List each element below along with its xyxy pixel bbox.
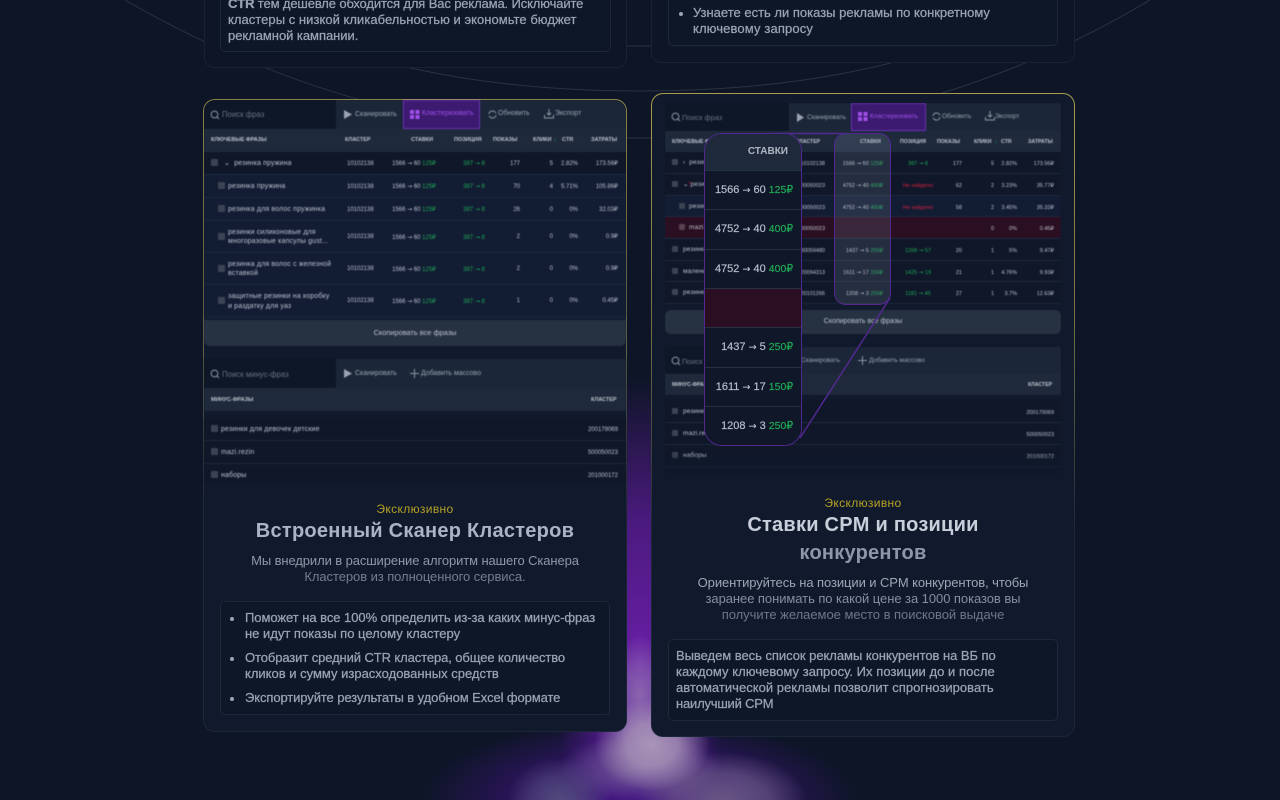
table rows: 10102138 <box>347 184 374 190</box>
highlight: bids column <box>834 133 891 305</box>
minus-phrases header <box>665 374 1061 395</box>
minus-phrases toolbar: Сканировать <box>355 370 397 377</box>
table rows: 0.9₽ <box>606 234 618 240</box>
magnifier rows: 1611 → 17 150₽ <box>716 380 793 392</box>
minus-phrases toolbar: Поиск минус-фраз <box>682 357 745 366</box>
minus-phrases rows <box>666 408 1060 459</box>
table rows: Не найдено <box>903 204 933 210</box>
minus-phrases rows: резинки <box>683 408 708 415</box>
heading: CPM bids and competitor positions <box>747 514 979 564</box>
table header: ПОЗИЦИЯ <box>900 139 926 145</box>
table header: CTR <box>1001 139 1012 145</box>
table rows: вставкой <box>228 270 258 277</box>
table header: ЗАТРАТЫ <box>1028 139 1053 145</box>
table rows: 4.76% <box>1001 270 1017 276</box>
table rows: 2 <box>517 266 520 272</box>
table rows: и раздатку для уаз <box>228 302 291 310</box>
table rows: 0% <box>1009 226 1017 232</box>
minus-phrases rows: 201000172 <box>1026 454 1054 460</box>
table rows: 3.7% <box>1004 291 1017 297</box>
table rows: ⌄ резинка пружина <box>224 160 292 167</box>
panel: CPM bids card <box>651 93 1075 737</box>
table header: ↓ <box>995 139 998 145</box>
magnifier rows: 1566 → 60 125₽ <box>715 184 793 196</box>
minus-phrases header: КЛАСТЕР <box>1028 382 1052 388</box>
table rows: резинка для волос пружинка <box>228 206 325 213</box>
table rows: 1566 → 60 125₽ <box>843 161 883 167</box>
magnifier header: СТАВКИ <box>748 146 788 157</box>
table rows: 2.82% <box>1001 161 1017 167</box>
minus-phrases rows: mazi.rezin <box>683 430 714 437</box>
table rows: 5% <box>1009 248 1017 254</box>
table rows: 2.82% <box>561 161 578 167</box>
table header <box>665 131 1061 152</box>
toolbar: Экспорт <box>555 110 581 117</box>
toolbar: Экспорт <box>995 113 1019 120</box>
table rows: 35.32₽ <box>1037 204 1054 210</box>
magnifier rows: 1437 → 5 250₽ <box>721 341 793 353</box>
minus-phrases rows: наборы <box>221 472 246 479</box>
minus-phrases rows <box>204 418 626 481</box>
text block: right card note <box>668 639 1058 721</box>
table header: КЛАСТЕР <box>796 139 820 145</box>
table rows: 12.63₽ <box>1037 291 1054 297</box>
table rows: 0% <box>569 266 578 272</box>
minus-phrases rows: 500050023 <box>1026 432 1054 438</box>
copy button: Скопировать все фразы <box>374 328 456 337</box>
table rows: 9.93₽ <box>1040 270 1054 276</box>
table rows: 58 <box>956 204 962 210</box>
description: right card: получите желаемое место в поисковой выдаче <box>722 607 1004 622</box>
table header: СТАВКИ <box>860 139 881 145</box>
table header: ПОКАЗЫ <box>937 139 960 145</box>
toolbar: Сканировать <box>355 111 397 118</box>
table rows: 27 <box>956 291 962 297</box>
table rows: 4752 → 40 400₽ <box>843 183 883 189</box>
table rows: 20 <box>956 248 962 254</box>
copy button <box>665 310 1061 334</box>
magnifier rows: 4752 → 40 400₽ <box>715 223 793 235</box>
table rows: 9.47₽ <box>1040 248 1054 254</box>
table rows: резинка пружина <box>228 183 285 190</box>
panel: top left card fragment <box>204 0 627 68</box>
screenshot: competitors table <box>665 103 1061 459</box>
table rows: 10102138 <box>347 207 374 213</box>
minus-phrases toolbar <box>204 359 626 388</box>
screenshot: cluster table <box>203 99 627 481</box>
text block: right card note: каждому ключевому запросу. Их позиции до и после <box>676 664 995 679</box>
table rows: 21 <box>956 270 962 276</box>
label: exclusive right: Эксклюзивно <box>824 496 902 510</box>
table rows <box>665 158 1061 304</box>
minus-phrases toolbar: Сканировать <box>801 357 840 364</box>
description: right card <box>698 575 1028 622</box>
text block: CTR tip: рекламной кампании. <box>228 28 358 42</box>
table rows: 20094313 <box>801 270 825 276</box>
table header: CTR <box>562 137 573 143</box>
table rows: 10102138 <box>347 161 374 167</box>
table rows: 26 <box>513 207 520 213</box>
toolbar: Кластеризовать <box>422 110 474 117</box>
table header: КЛИКИ <box>974 139 991 145</box>
minus-phrases header: МИНУС-ФРАЗЫ <box>211 397 253 403</box>
table rows: 0 <box>550 207 553 213</box>
table rows: 10102138 <box>347 298 374 304</box>
table rows: 0 <box>550 266 553 272</box>
toolbar: Обновить <box>942 113 971 120</box>
minus-phrases header: МИНУС-ФРАЗЫ <box>672 382 712 388</box>
table rows: маленькие <box>683 268 717 274</box>
table rows: 1566 → 60 125₽ <box>392 266 436 273</box>
list: left card features: кликов и сумму израсходованных средств <box>245 666 499 681</box>
minus-phrases header: КЛАСТЕР <box>591 397 617 403</box>
table rows: 20101266 <box>801 291 825 297</box>
text block: CTR tip <box>220 0 611 52</box>
magnifier header <box>705 134 801 170</box>
table rows: 1181 → 45 <box>905 291 931 297</box>
table rows: 4752 → 40 400₽ <box>843 204 883 210</box>
table header <box>204 129 626 152</box>
table rows: 1 <box>991 291 994 297</box>
toolbar: Кластеризовать <box>870 113 918 120</box>
toolbar <box>204 100 626 129</box>
copy button <box>204 320 626 346</box>
table rows: 1566 → 60 125₽ <box>392 234 436 241</box>
panel: cluster scanner card <box>203 99 627 732</box>
table rows: 3.23% <box>1001 183 1017 189</box>
table rows: защитные резинки на коробку <box>228 293 329 300</box>
table rows: mazi.rezin <box>689 224 720 231</box>
toolbar: Сканировать <box>807 114 846 121</box>
heading: built-in cluster scanner: Встроенный Сканер Кластеров <box>256 520 574 542</box>
table rows: 1425 → 19 <box>905 270 931 276</box>
table rows: резинки силиконовые для <box>228 228 316 236</box>
table rows: › резинка пружина <box>683 159 743 166</box>
table rows: 10102138 <box>801 161 825 167</box>
table rows: 500050023 <box>797 204 825 210</box>
label: exclusive left: Эксклюзивно <box>376 502 454 516</box>
table header: ПОЗИЦИЯ <box>454 137 482 143</box>
table rows: 2 <box>991 183 994 189</box>
table rows: 387 → 8 <box>463 266 485 273</box>
toolbar: Поиск фраз <box>222 110 264 119</box>
table rows: 500050023 <box>797 226 825 232</box>
table rows: резинки <box>689 202 714 210</box>
table rows: 0% <box>569 298 578 304</box>
table header: ПОКАЗЫ <box>493 137 517 143</box>
table rows: 10102138 <box>347 266 374 272</box>
table rows: 0 <box>550 234 553 240</box>
table rows: 0 <box>991 226 994 232</box>
minus-phrases rows: 200179069 <box>588 427 618 433</box>
table rows: 1566 → 60 125₽ <box>392 298 436 305</box>
list: left card features: не идут показы по целому кластеру <box>245 626 460 641</box>
description: left card: Мы внедрили в расширение алгоритм нашего Сканера <box>251 553 579 568</box>
minus-phrases header <box>204 388 626 411</box>
table rows: 70 <box>513 184 520 190</box>
table rows: 387 → 8 <box>463 298 485 305</box>
toolbar: Поиск фраз <box>682 113 722 122</box>
table rows: 177 <box>510 161 520 167</box>
table rows: 0.9₽ <box>606 266 618 272</box>
description: right card: заранее понимать по какой цене за 1000 показов вы <box>706 591 1020 606</box>
minus-phrases rows: резинки для девочек детские <box>221 426 320 433</box>
table rows: 5.71% <box>561 184 578 190</box>
magnifier rows: 1208 → 3 250₽ <box>721 420 793 432</box>
list: left card features: Отобразит средний CTR кластера, общее количество <box>245 650 565 665</box>
table rows: ⌄ резинки <box>683 181 715 188</box>
table rows: 500050023 <box>797 183 825 189</box>
text block: impressions bullet <box>668 0 1058 46</box>
table rows: 173.56₽ <box>596 161 618 167</box>
table header: КЛЮЧЕВЫЕ ФРАЗЫ <box>211 137 267 143</box>
table rows: ! <box>689 181 691 188</box>
heading: CPM bids and competitor positions: конкурентов <box>799 542 926 564</box>
table rows: резинки <box>683 289 708 296</box>
table rows: 10102138 <box>347 234 374 240</box>
table header: КЛЮЧЕВЫЕ ФРАЗЫ <box>672 139 724 145</box>
table header: КЛАСТЕР <box>345 137 371 143</box>
table rows: 0.45₽ <box>602 298 618 304</box>
table rows <box>203 152 627 318</box>
heading: CPM bids and competitor positions: Ставки CPM и позиции <box>747 514 979 536</box>
table rows: резинка <box>683 246 708 253</box>
table rows: 62 <box>956 183 962 189</box>
table rows: 32.03₽ <box>599 207 618 213</box>
table rows: 0 <box>550 298 553 304</box>
minus-phrases rows: mazi.rezin <box>221 449 254 456</box>
table rows: 1437 → 5 250₽ <box>846 248 883 254</box>
table header: ↓ <box>554 137 557 143</box>
table header: КЛИКИ <box>533 137 551 143</box>
minus-phrases rows: 200179069 <box>1026 410 1054 416</box>
minus-phrases toolbar: Поиск минус-фраз <box>222 370 289 379</box>
table rows: 5 <box>991 161 994 167</box>
description: left card <box>251 553 579 584</box>
table rows: 0.45₽ <box>1040 226 1054 232</box>
table rows: 30059480 <box>801 248 825 254</box>
toolbar: Обновить <box>498 110 530 117</box>
table rows: многоразовые капсулы gust... <box>228 238 328 245</box>
table rows: резинка для волос с железной <box>228 260 331 268</box>
table rows: 2 <box>991 204 994 210</box>
magnified bids column <box>704 133 802 446</box>
table rows: 1 <box>991 248 994 254</box>
minus-phrases rows: наборы <box>683 452 707 459</box>
table rows: 1566 → 60 125₽ <box>392 160 436 167</box>
toolbar <box>665 103 1061 131</box>
table rows: 387 → 8 <box>463 183 485 190</box>
table rows: 387 → 8 <box>463 160 485 167</box>
magnifier rows <box>705 170 801 445</box>
list: left card features <box>220 601 610 715</box>
table rows: 105.86₽ <box>596 184 618 190</box>
text block: right card note: Выведем весь список рекламы конкурентов на ВБ по <box>676 648 996 663</box>
table rows: 0% <box>569 234 578 240</box>
panel: top right card fragment <box>651 0 1075 63</box>
text block: impressions bullet: Узнаете есть ли показы рекламы по конкретному <box>693 5 990 20</box>
minus-phrases toolbar: Добавить массово <box>869 357 925 364</box>
minus-phrases rows: 500050023 <box>588 450 618 456</box>
table rows: 4 <box>550 184 553 190</box>
table header: ЗАТРАТЫ <box>591 137 617 143</box>
table rows: 1611 → 17 150₽ <box>843 270 883 276</box>
table rows: 1 <box>517 298 520 304</box>
description: left card: Кластеров из полноценного сервиса. <box>304 569 526 584</box>
text block: right card note: автоматической рекламы позволит спрогнозировать <box>676 680 994 695</box>
table rows: 387 → 8 <box>908 161 928 167</box>
text block: CTR tip: кластеры с низкой кликабельностью и экономьте бюджет <box>228 12 577 27</box>
table rows: 0% <box>569 207 578 213</box>
table rows: 387 → 8 <box>463 234 485 241</box>
table rows: 1 <box>991 270 994 276</box>
table rows: Не найдено <box>903 183 933 189</box>
table header: СТАВКИ <box>411 137 433 143</box>
text block: impressions bullet: ключевому запросу <box>693 21 813 36</box>
magnifier rows: 4752 → 40 400₽ <box>715 263 793 275</box>
table rows: 1566 → 60 125₽ <box>392 183 436 190</box>
table rows: 177 <box>953 161 962 167</box>
table rows: 5 <box>550 161 553 167</box>
list: left card features: Поможет на все 100% определить из-за каких минус-фраз <box>245 610 595 625</box>
minus-phrases rows: 201000172 <box>588 473 618 479</box>
table rows: 2 <box>517 234 520 240</box>
table rows: 1268 → 57 <box>905 248 931 254</box>
table rows: 1566 → 60 125₽ <box>392 206 436 213</box>
copy button: Скопировать все фразы <box>824 318 902 325</box>
minus-phrases toolbar <box>665 347 1061 374</box>
table rows: 35.77₽ <box>1037 183 1054 189</box>
table rows: 173.56₽ <box>1034 161 1054 167</box>
table rows: 3.45% <box>1001 204 1017 210</box>
description: right card: Ориентируйтесь на позиции и CPM конкурентов, чтобы <box>698 575 1028 590</box>
table rows: 387 → 8 <box>463 206 485 213</box>
list: left card features: Экспортируйте результаты в удобном Excel формате <box>245 690 560 705</box>
text block: right card note: наилучший CPM <box>676 696 773 711</box>
table rows: 1208 → 3 250₽ <box>846 291 883 297</box>
minus-phrases toolbar: Добавить массово <box>421 370 481 377</box>
